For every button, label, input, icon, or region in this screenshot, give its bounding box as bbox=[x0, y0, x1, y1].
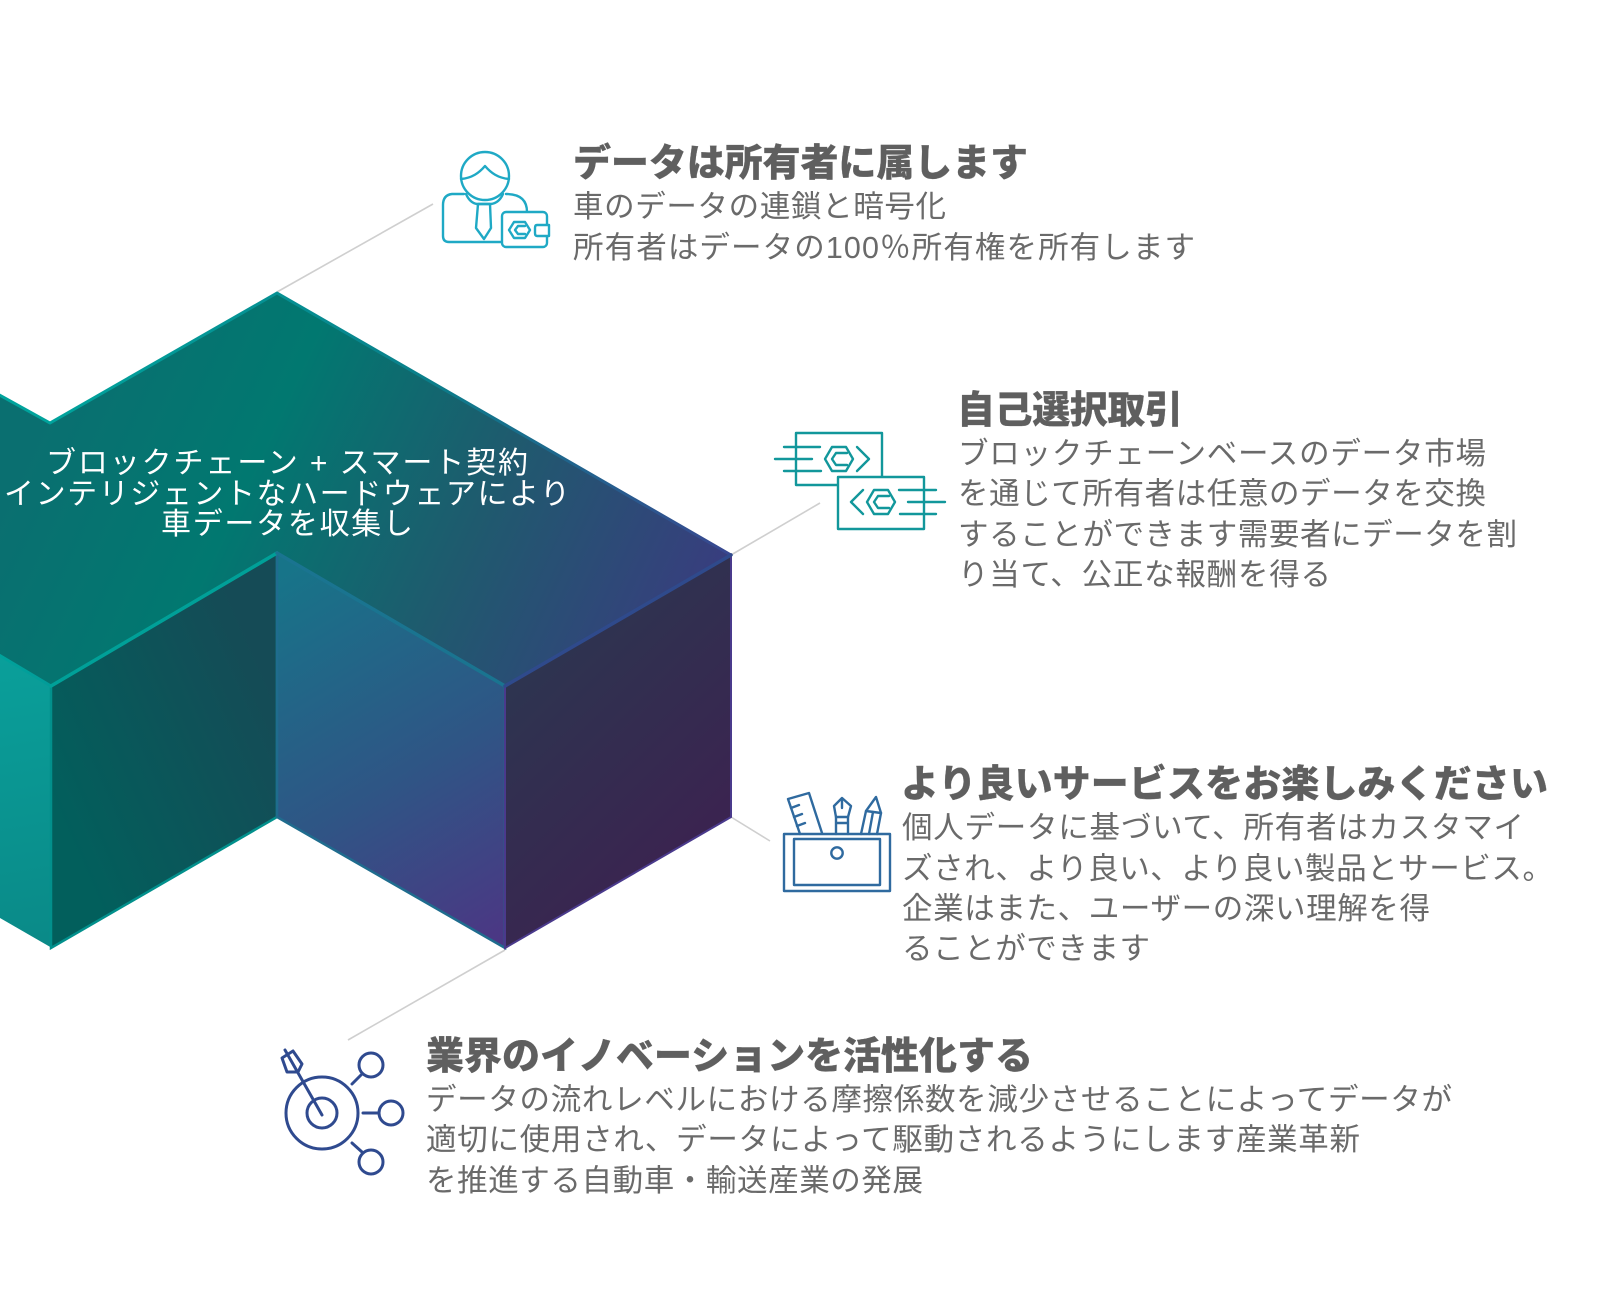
centre text on block: ブロックチェーン + スマート契約 bbox=[46, 447, 528, 480]
heading: より良いサービスをお楽しみください bbox=[901, 763, 1548, 806]
body: 企業はまた、ユーザーの深い理解を得 bbox=[902, 892, 1430, 926]
text block: self-selected trade bbox=[957, 390, 1517, 592]
connector lines bbox=[277, 204, 820, 1040]
isometric block bbox=[0, 293, 731, 948]
centre text on block: 車データを収集し bbox=[161, 508, 413, 541]
icon: owner with wallet bbox=[443, 152, 549, 247]
heading: データは所有者に属します bbox=[573, 142, 1028, 185]
body: ブロックチェーンベースのデータ市場 bbox=[958, 437, 1486, 471]
centre text on block bbox=[4, 447, 570, 541]
body: データの流れレベルにおける摩擦係数を減少させることによってデータが bbox=[426, 1083, 1452, 1117]
icon: target with arrow and nodes bbox=[282, 1050, 403, 1174]
body bbox=[573, 190, 1195, 265]
body: ズされ、より良い、より良い製品とサービス。 bbox=[902, 852, 1553, 886]
block face: left teal bbox=[0, 655, 52, 948]
body: することができます需要者にデータを割 bbox=[958, 518, 1517, 552]
body: を通じて所有者は任意のデータを交換 bbox=[958, 477, 1486, 511]
body: 所有者はデータの100％所有権を所有します bbox=[573, 231, 1195, 265]
body bbox=[958, 437, 1517, 592]
block ridge highlights bbox=[51, 553, 731, 686]
block face: dark green bbox=[51, 553, 277, 948]
body bbox=[902, 811, 1553, 966]
block face: top surface bbox=[0, 293, 731, 686]
centre text on block: インテリジェントなハードウェアにより bbox=[4, 478, 570, 511]
text block: data ownership bbox=[573, 142, 1195, 265]
block face: dark purple bbox=[505, 555, 731, 948]
heading: 自己選択取引 bbox=[957, 390, 1183, 432]
text block: better services bbox=[901, 763, 1553, 966]
body: を推進する自動車・輸送産業の発展 bbox=[426, 1164, 923, 1198]
heading: 業界のイノベーションを活性化する bbox=[426, 1036, 1033, 1078]
icon: tool box with ruler, pen and pencil bbox=[784, 793, 890, 891]
block face: blue bbox=[277, 553, 505, 948]
body: ることができます bbox=[902, 932, 1150, 966]
body: 個人データに基づいて、所有者はカスタマイ bbox=[902, 811, 1524, 845]
text block: industry innovation bbox=[426, 1036, 1452, 1198]
body: り当て、公正な報酬を得る bbox=[958, 558, 1331, 592]
body: 車のデータの連鎖と暗号化 bbox=[573, 190, 946, 224]
body: 適切に使用され、データによって駆動されるようにします産業革新 bbox=[426, 1123, 1360, 1157]
body bbox=[426, 1083, 1452, 1198]
icon: data exchange cards bbox=[775, 433, 945, 529]
